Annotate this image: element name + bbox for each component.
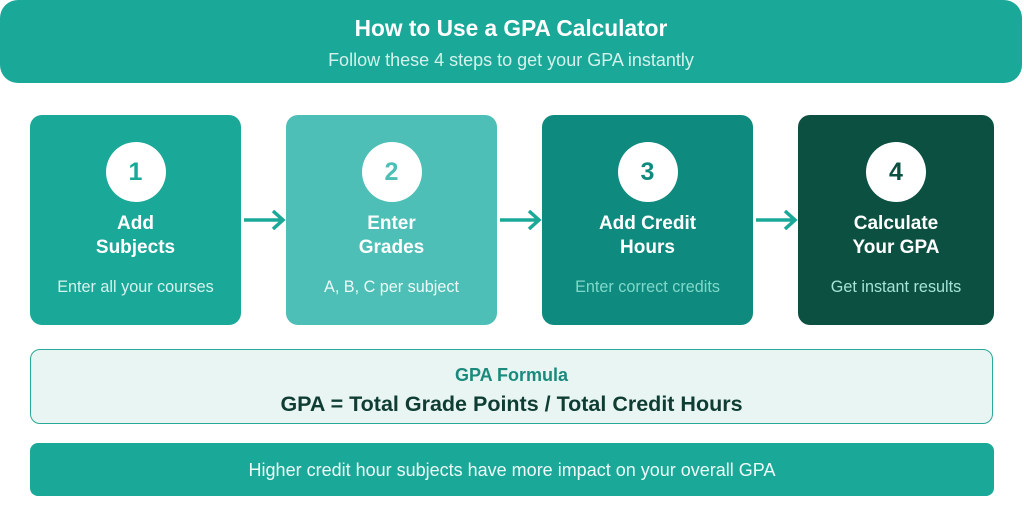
step 4 card: Your GPA: [853, 237, 939, 258]
step 3 card: Enter correct credits: [575, 278, 720, 296]
formula label: GPA Formula: [455, 365, 568, 385]
arrow 2: [500, 210, 542, 230]
footer note: [30, 443, 994, 496]
step 3 card: 3: [641, 158, 654, 186]
footer note: Higher credit hour subjects have more impact on your overall GPA: [249, 460, 775, 480]
step 2 card: 2: [385, 158, 398, 186]
step 2 card: [286, 115, 497, 325]
step 1 card: [30, 115, 241, 325]
header: [0, 0, 1022, 83]
step 2 card: Grades: [359, 237, 424, 258]
step 3 card: [542, 115, 753, 325]
step 4 card: [798, 115, 994, 325]
step 2 card: A, B, C per subject: [324, 278, 459, 296]
arrow 1: [244, 210, 286, 230]
subtitle: Follow these 4 steps to get your GPA instantly: [328, 50, 694, 70]
step 1 card: Enter all your courses: [57, 278, 214, 296]
step 1 card: Add: [117, 213, 154, 234]
step 4 card: 4: [889, 158, 903, 186]
arrow 3: [756, 210, 798, 230]
title: How to Use a GPA Calculator: [355, 15, 667, 41]
step 4 card: Calculate: [854, 213, 938, 234]
step 2 card: Enter: [367, 213, 416, 234]
step 3 card: Hours: [620, 237, 675, 258]
formula: GPA = Total Grade Points / Total Credit Hours: [280, 392, 743, 416]
step 3 card: Add Credit: [599, 213, 696, 234]
step 4 card: Get instant results: [831, 278, 961, 296]
step 1 card: Subjects: [96, 237, 175, 258]
step 1 card: 1: [129, 158, 142, 186]
formula box: [30, 349, 993, 424]
